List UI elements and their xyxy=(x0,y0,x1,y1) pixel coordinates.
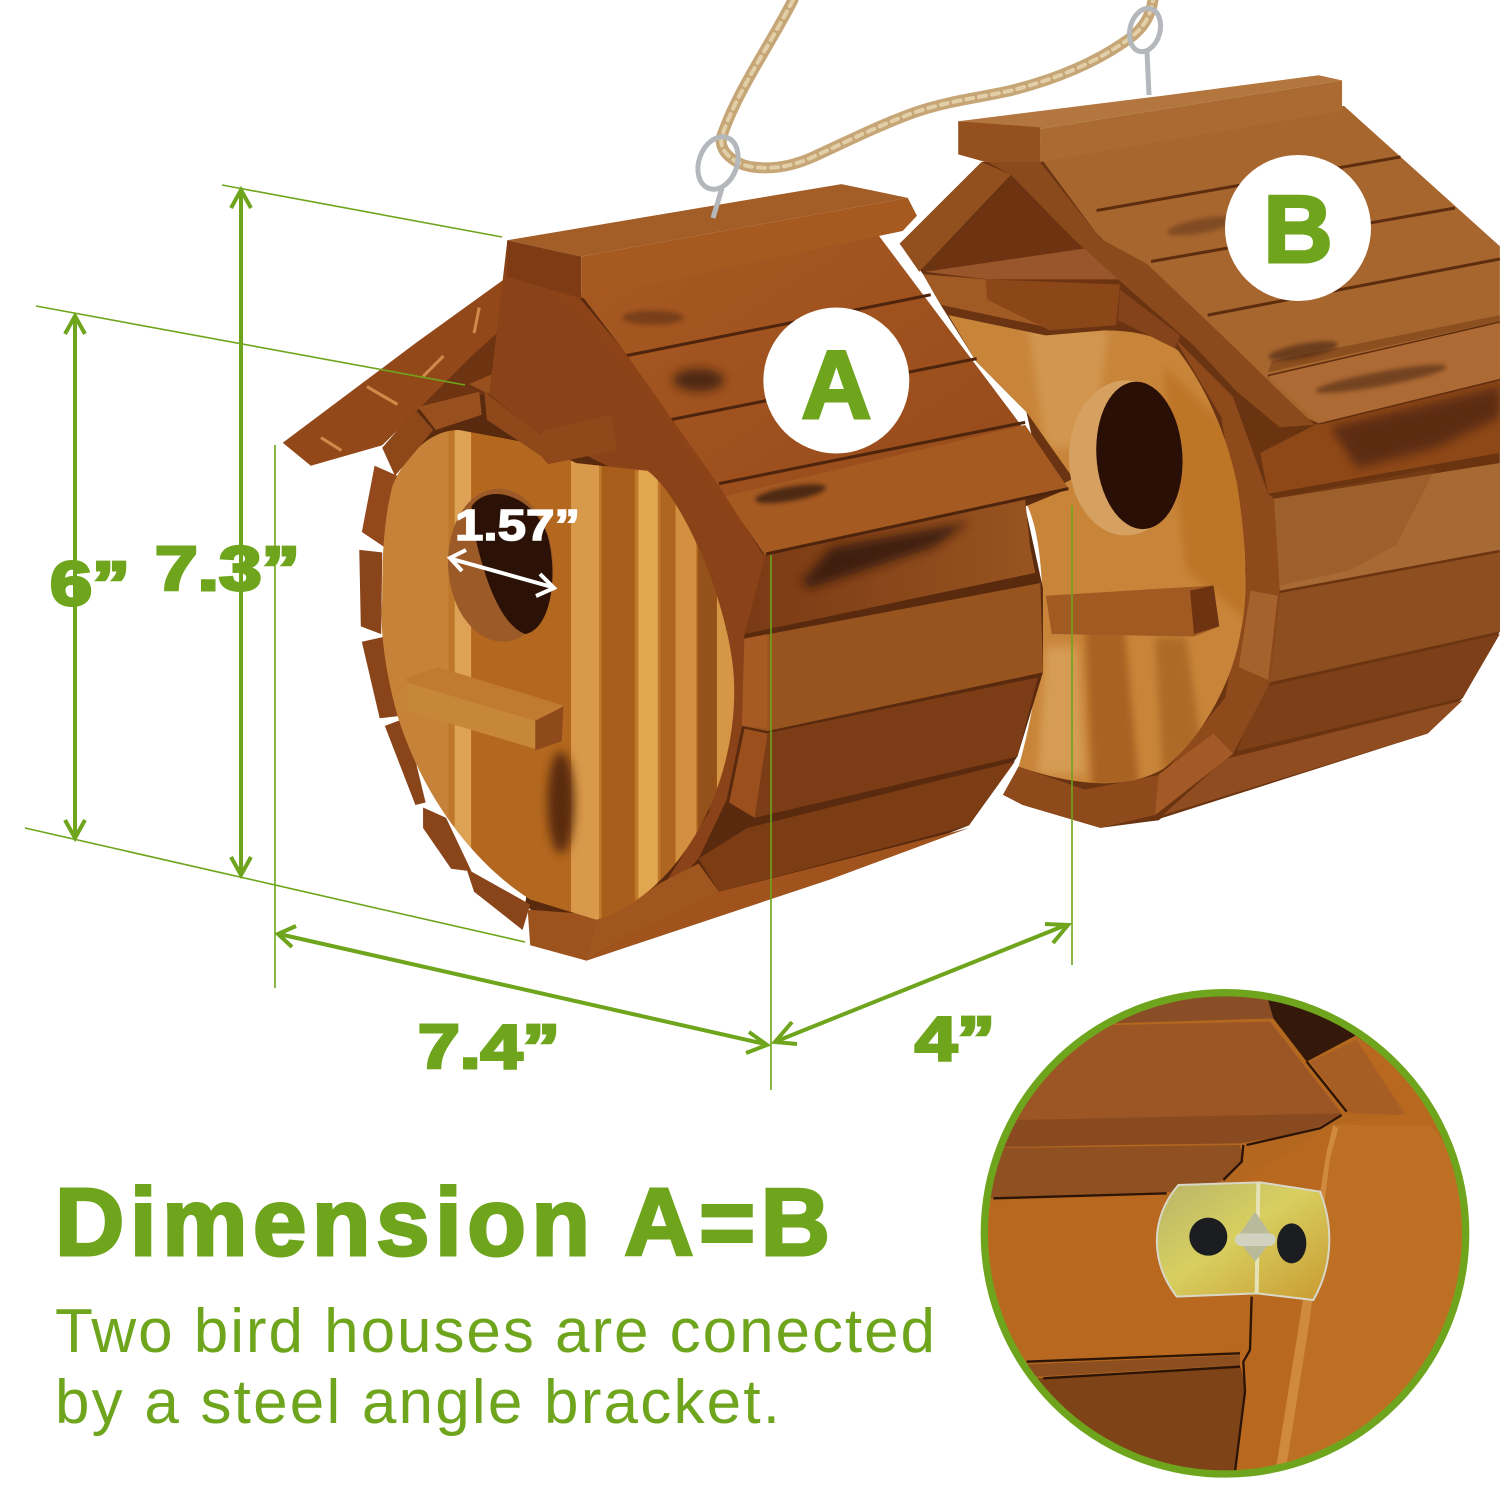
label: 7.4 inches: 7.4” xyxy=(418,1013,560,1082)
inset wood background xyxy=(988,996,1462,1470)
dimension lines xyxy=(25,185,1072,1090)
right screw xyxy=(1277,1223,1306,1263)
eye hook A xyxy=(691,131,745,218)
pin xyxy=(1235,1233,1276,1246)
label: 6 inches: 6” xyxy=(50,550,130,619)
house A face xyxy=(377,425,744,930)
house B front ring xyxy=(1003,338,1280,828)
description: Two bird houses are conected xyxy=(55,1297,935,1366)
inset border xyxy=(984,993,1466,1474)
house B side planks xyxy=(1139,374,1500,820)
house A hole xyxy=(444,486,557,644)
house A xyxy=(283,184,1068,961)
house B gable xyxy=(900,162,1124,325)
arrow: 6 inch height xyxy=(65,316,85,838)
arrow: 4 inch depth xyxy=(775,924,1068,1044)
house B top block xyxy=(923,274,1180,348)
house B xyxy=(900,75,1500,828)
house A perch xyxy=(407,667,563,750)
house B face xyxy=(945,305,1256,795)
arrow: 7.3 inch height xyxy=(231,190,251,875)
description xyxy=(55,1297,935,1437)
house B perch xyxy=(1046,586,1219,637)
house A label xyxy=(763,308,909,453)
label: 7.3 inches: 7.3” xyxy=(155,535,300,604)
inset: bracket close-up xyxy=(980,985,1480,1485)
house A gable xyxy=(283,277,627,466)
label: hole diameter: 1.57” xyxy=(455,501,580,550)
house A backing xyxy=(382,234,1068,961)
house A label: A xyxy=(801,330,871,439)
label: 4 inches: 4” xyxy=(915,1005,995,1074)
description: by a steel angle bracket. xyxy=(55,1368,780,1437)
steel angle bracket xyxy=(1157,1182,1329,1300)
eye hook B xyxy=(1125,5,1165,95)
rope xyxy=(721,0,1153,168)
extension lines xyxy=(25,185,1072,1090)
house A side planks xyxy=(586,499,1043,961)
left screw xyxy=(1189,1218,1227,1256)
house A roof xyxy=(507,184,1068,558)
arrow: 7.4 inch width xyxy=(278,926,767,1053)
house B label: B xyxy=(1263,176,1333,283)
house B backing xyxy=(900,157,1319,828)
house B label xyxy=(1225,155,1371,301)
heading: Dimension A=B xyxy=(55,1169,830,1276)
house A front ring xyxy=(359,241,765,961)
house A top block xyxy=(382,392,617,476)
house B roof xyxy=(958,75,1500,427)
house B hole xyxy=(1069,374,1190,536)
arrow: hole diameter xyxy=(450,550,554,596)
